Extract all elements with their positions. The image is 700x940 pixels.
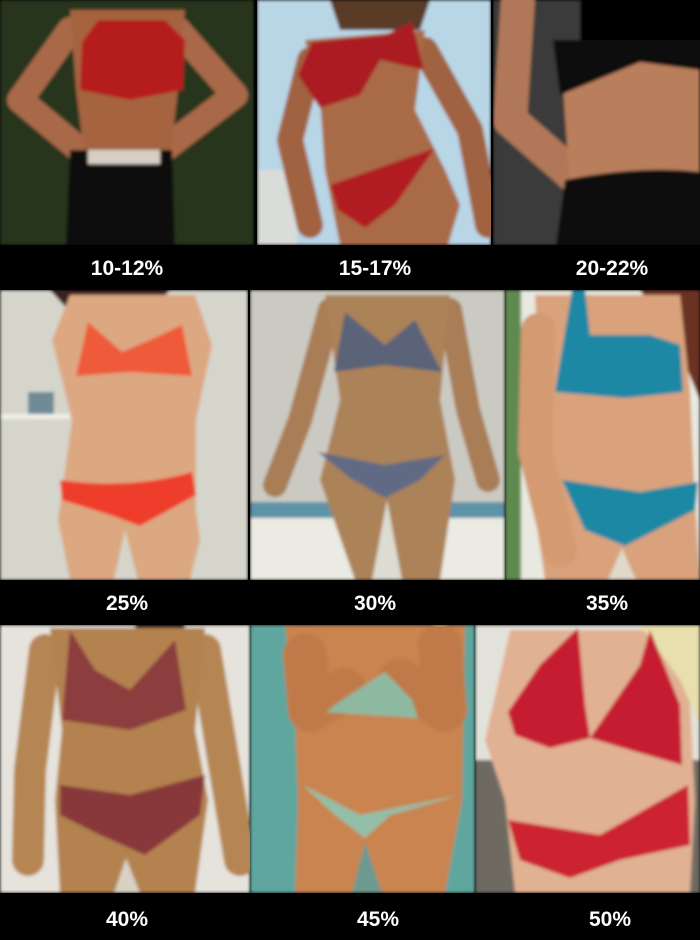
panel: 35% figure: [505, 290, 700, 580]
torso and legs: [305, 30, 460, 245]
top: [553, 40, 700, 95]
hair: [133, 625, 187, 631]
bottom: [60, 472, 196, 526]
torso: [70, 10, 185, 160]
hair: [640, 290, 700, 400]
label: 35%: 35%: [586, 592, 628, 615]
leg gap: [372, 500, 402, 580]
hair: [49, 290, 171, 308]
arms: [28, 650, 240, 860]
top: [80, 20, 185, 100]
bottom: [562, 480, 698, 546]
bottom: [508, 785, 690, 878]
top: [298, 22, 424, 108]
panel: 25% figure: [0, 290, 248, 580]
torso: [561, 58, 700, 183]
panel: 10-12% figure: [0, 0, 254, 245]
top: [508, 628, 682, 765]
bottom: [330, 148, 435, 228]
torso and legs: [285, 625, 465, 893]
figure: [52, 295, 212, 580]
arms: [275, 310, 488, 485]
label: 50%: 50%: [589, 908, 631, 931]
trousers: [556, 170, 700, 245]
arms: [290, 50, 488, 225]
top: [555, 290, 683, 398]
torso and legs: [320, 295, 455, 580]
top: [62, 630, 186, 730]
label: 25%: 25%: [106, 592, 148, 615]
panel: 50% figure: [475, 625, 700, 893]
figure: [485, 630, 695, 893]
label: 30%: 30%: [354, 592, 396, 615]
panel: 20-22% figure: [493, 0, 700, 245]
bottom: [303, 785, 460, 838]
label: 15-17%: 15-17%: [339, 257, 412, 280]
figure: [530, 295, 700, 580]
top: [76, 322, 192, 376]
bottom: [60, 775, 205, 855]
hair: [330, 0, 430, 30]
leg gap: [114, 530, 138, 580]
trousers: [66, 150, 175, 245]
panel: 45% figure: [250, 625, 475, 893]
leg gap: [352, 842, 382, 893]
label: 40%: 40%: [106, 908, 148, 931]
arm: [510, 0, 590, 190]
panel: 40% figure: [0, 625, 250, 893]
panel: 15-17% figure: [257, 0, 491, 245]
torso and legs: [50, 628, 208, 893]
leg gap: [608, 548, 636, 580]
panel: 30% figure: [250, 290, 505, 580]
label: 45%: 45%: [357, 908, 399, 931]
label: 10-12%: 10-12%: [91, 257, 164, 280]
arm: [535, 330, 560, 550]
hair: [640, 625, 700, 725]
label: 20-22%: 20-22%: [576, 257, 649, 280]
arms: [305, 645, 445, 710]
arms: [20, 30, 235, 160]
leg gap: [114, 858, 140, 893]
top: [326, 672, 418, 718]
bottom: [318, 452, 445, 498]
top: [334, 312, 442, 372]
